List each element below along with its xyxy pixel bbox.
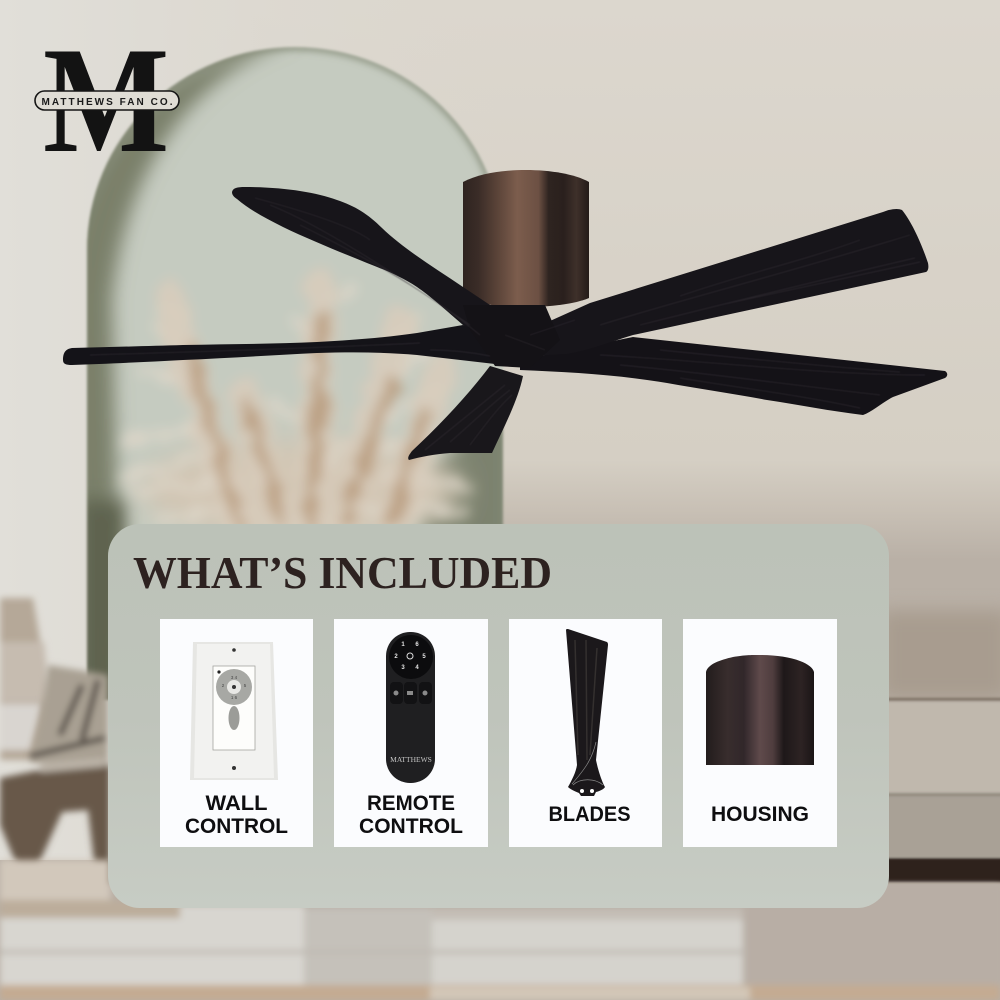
remote image: MATTHEWS: [390, 755, 432, 764]
wall control image: 2: [222, 683, 225, 688]
fan blade: long left: [63, 325, 510, 365]
armchair: [0, 598, 50, 760]
label: CONTROL: [359, 815, 463, 838]
fan blade: upper right: [530, 209, 928, 356]
label: CONTROL: [185, 815, 288, 838]
wood grain: [90, 198, 925, 450]
floor: [0, 860, 1000, 1000]
logo: Matthews Fan Co.: [35, 15, 179, 184]
housing image: [706, 655, 814, 765]
heading: WHAT’S INCLUDED: [133, 547, 552, 598]
label: WALL: [206, 792, 268, 815]
remote image: 6: [415, 642, 419, 648]
panel: what's included: [108, 524, 889, 908]
blade image: [566, 629, 608, 796]
logo name pill: [35, 91, 179, 110]
wall control image: 5: [244, 683, 247, 688]
wall control image: 1 6: [231, 695, 238, 700]
arched wall niche with pampas grass: [85, 46, 504, 702]
remote image: 4: [415, 665, 419, 671]
fan blade: upper left: [232, 187, 505, 345]
label: REMOTE: [367, 792, 455, 815]
remote image: [386, 632, 435, 783]
sofa: [880, 610, 1000, 882]
remote image: 5: [422, 654, 426, 660]
card: remote control: [334, 619, 488, 847]
card: wall control: [160, 619, 313, 847]
logo name pill: MATTHEWS FAN CO.: [42, 97, 173, 108]
remote image: 3: [401, 665, 405, 671]
remote image: 1: [401, 642, 405, 648]
draped blanket: [0, 665, 110, 890]
ceiling fan: [63, 170, 947, 460]
fan blade: lower right: [520, 337, 947, 415]
fan hub: [463, 305, 560, 368]
pampas plumes: [125, 285, 468, 525]
card: housing: [683, 619, 837, 847]
wall control image: 3 4: [231, 675, 238, 680]
fan housing: [463, 170, 589, 307]
logo serif M: M: [43, 15, 169, 184]
label: HOUSING: [711, 803, 809, 826]
remote image: 2: [394, 654, 398, 660]
card: blades: [509, 619, 662, 847]
label: BLADES: [548, 803, 630, 826]
wall control image: [190, 642, 278, 780]
fan blade: lower: [408, 366, 523, 460]
